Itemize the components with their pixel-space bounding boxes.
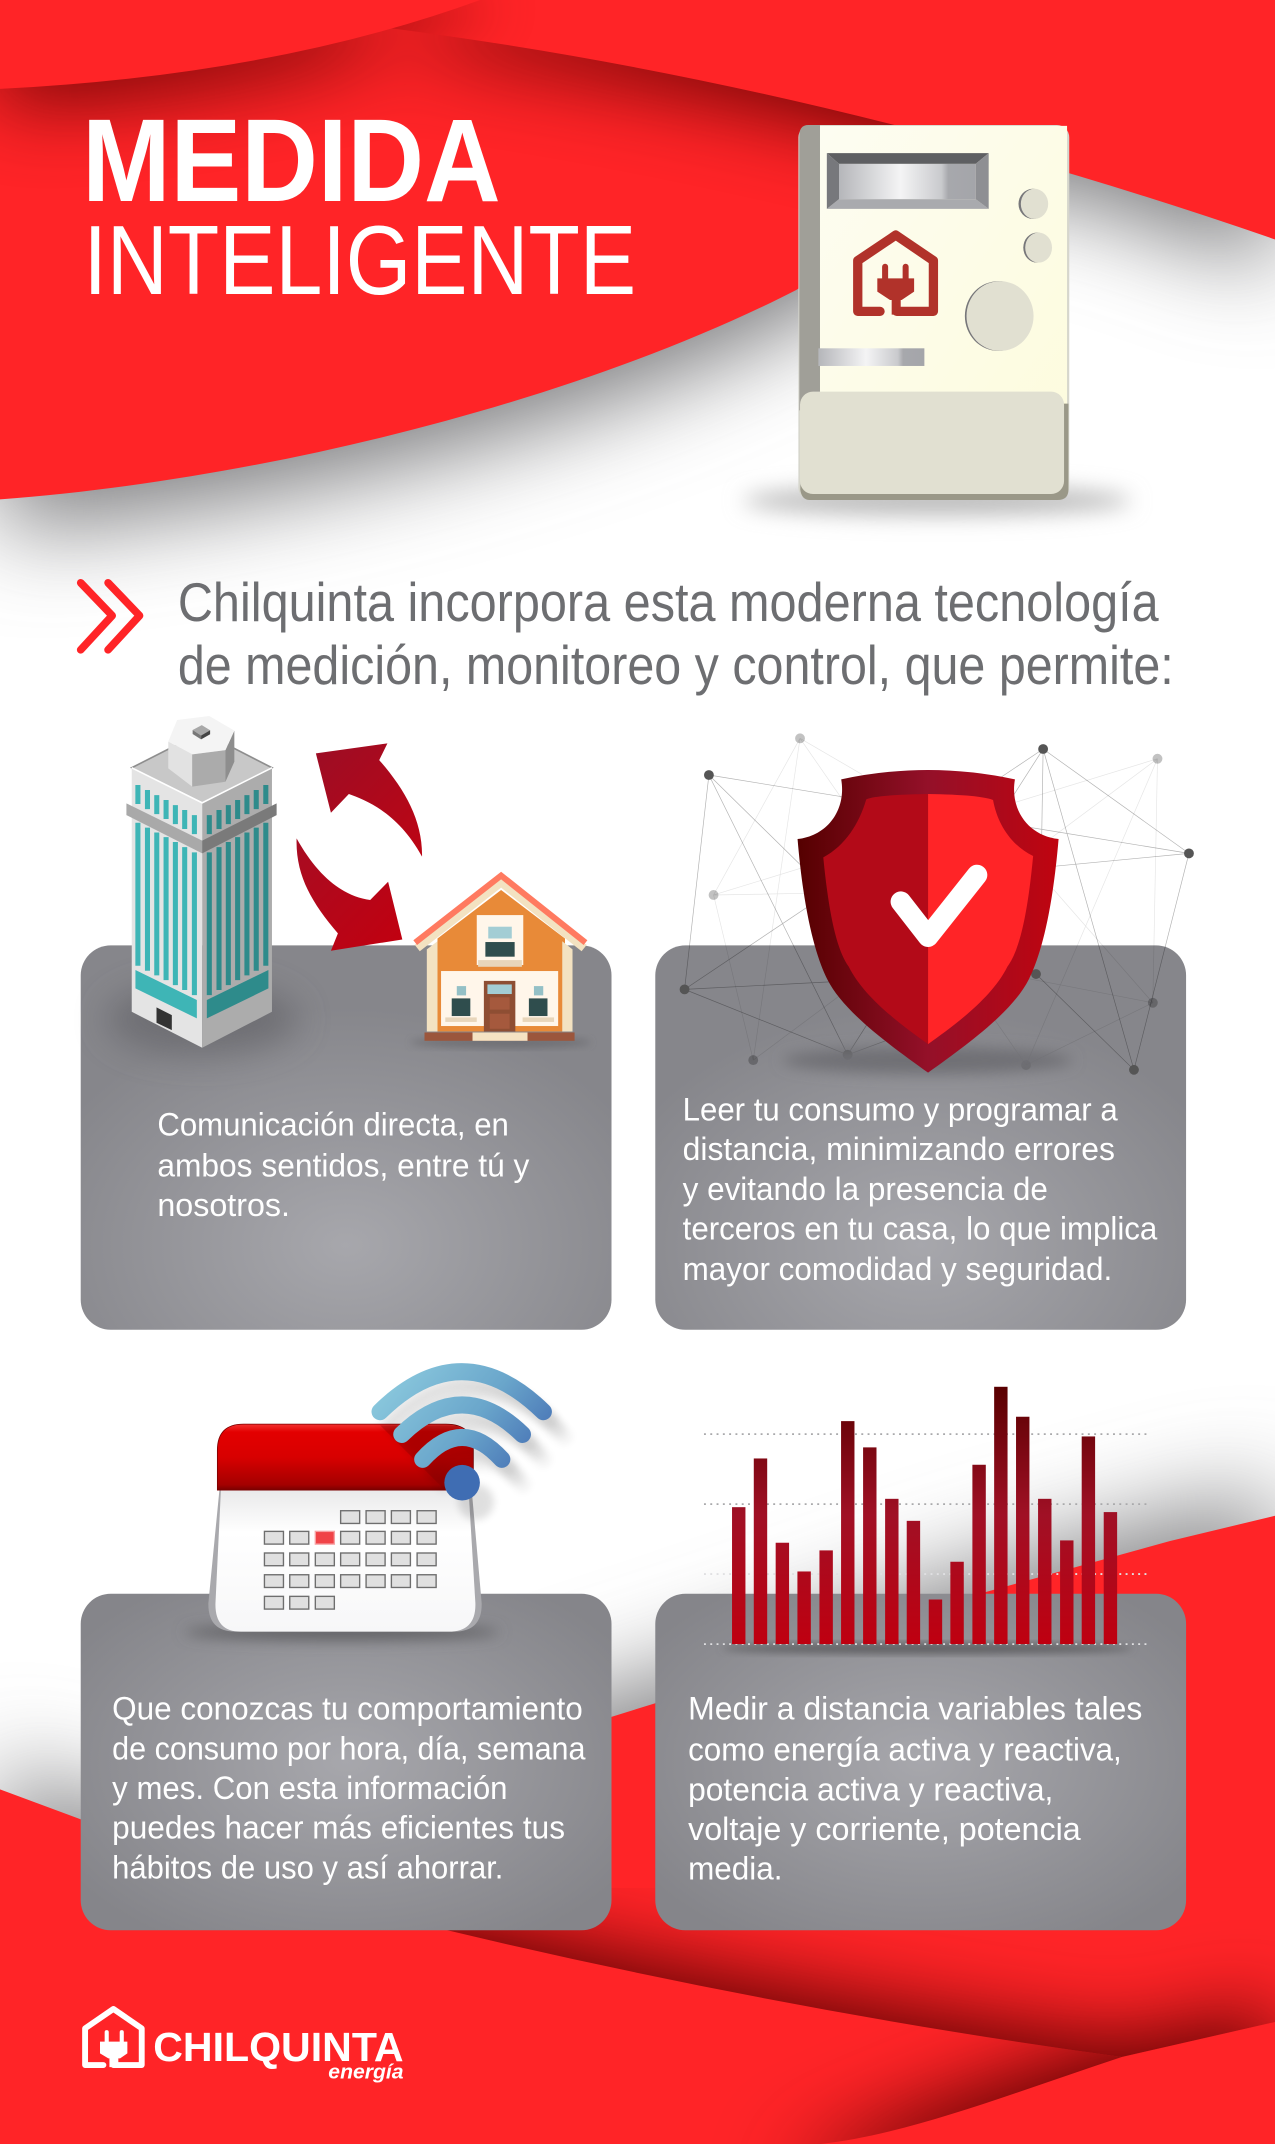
- panel text: Leer tu consumo y programar a: [683, 1090, 1118, 1127]
- logo: Chilquinta energía: CHILQUINTA: [153, 2024, 404, 2070]
- icon: house with plug: [858, 235, 933, 315]
- icon: house: [410, 876, 591, 1048]
- panel text: y evitando la presencia de: [683, 1170, 1048, 1207]
- arrow: down: [297, 838, 402, 951]
- intro text: Chilquinta incorpora esta moderna tecnología: [178, 571, 1159, 633]
- panel text: Comunicación directa, en: [157, 1105, 509, 1142]
- icon: shield with check: [783, 770, 1073, 1074]
- panel text: de consumo por hora, día, semana: [112, 1729, 586, 1766]
- panel text: voltaje y corriente, potencia: [688, 1810, 1081, 1847]
- panel text: hábitos de uso y así ahorrar.: [112, 1848, 503, 1885]
- arrow: up: [316, 743, 422, 857]
- panel text: Medir a distancia variables tales: [688, 1690, 1142, 1727]
- icon: logo house with plug: [85, 2009, 142, 2067]
- panel: consumption behaviour: [81, 1372, 612, 1930]
- panel text: Que conozcas tu comportamiento: [112, 1690, 583, 1727]
- panel text: [683, 1090, 1158, 1287]
- panel text: puedes hacer más eficientes tus: [112, 1809, 565, 1846]
- title: INTELIGENTE: [83, 205, 636, 315]
- panel text: [112, 1690, 586, 1885]
- network graphic: [680, 733, 1194, 1075]
- panel text: y mes. Con esta información: [112, 1769, 508, 1806]
- panel: remote reading: [655, 733, 1194, 1330]
- bar chart: [704, 1387, 1150, 1654]
- panel text: media.: [688, 1850, 783, 1887]
- panel text: mayor comodidad y seguridad.: [683, 1250, 1112, 1287]
- logo: Chilquinta energía: energía: [328, 2061, 404, 2084]
- panel text: potencia activa y reactiva,: [688, 1770, 1053, 1807]
- panel text: [688, 1690, 1142, 1887]
- title: MEDIDA: [82, 94, 501, 226]
- icon: calendar with wifi: [185, 1372, 564, 1640]
- panel: direct communication: [81, 716, 612, 1330]
- tower windows: [138, 785, 194, 995]
- calendar grid: [264, 1511, 436, 1609]
- panel text: nosotros.: [157, 1186, 290, 1223]
- icon: smart meter: [743, 125, 1131, 516]
- panel text: ambos sentidos, entre tú y: [157, 1147, 530, 1184]
- panel: remote variables: [655, 1387, 1186, 1930]
- panel text: como energía activa y reactiva,: [688, 1731, 1122, 1768]
- panel text: terceros en tu casa, lo que implica: [683, 1209, 1158, 1246]
- intro text: [178, 571, 1174, 696]
- panel text: distancia, minimizando errores: [683, 1130, 1115, 1167]
- icon: office tower: [107, 716, 298, 1055]
- logo: Chilquinta energía: [85, 2009, 404, 2084]
- intro text: de medición, monitoreo y control, que permite:: [178, 634, 1174, 696]
- icon: double chevron: [81, 583, 140, 650]
- panel text: [157, 1105, 530, 1223]
- title: [82, 94, 636, 315]
